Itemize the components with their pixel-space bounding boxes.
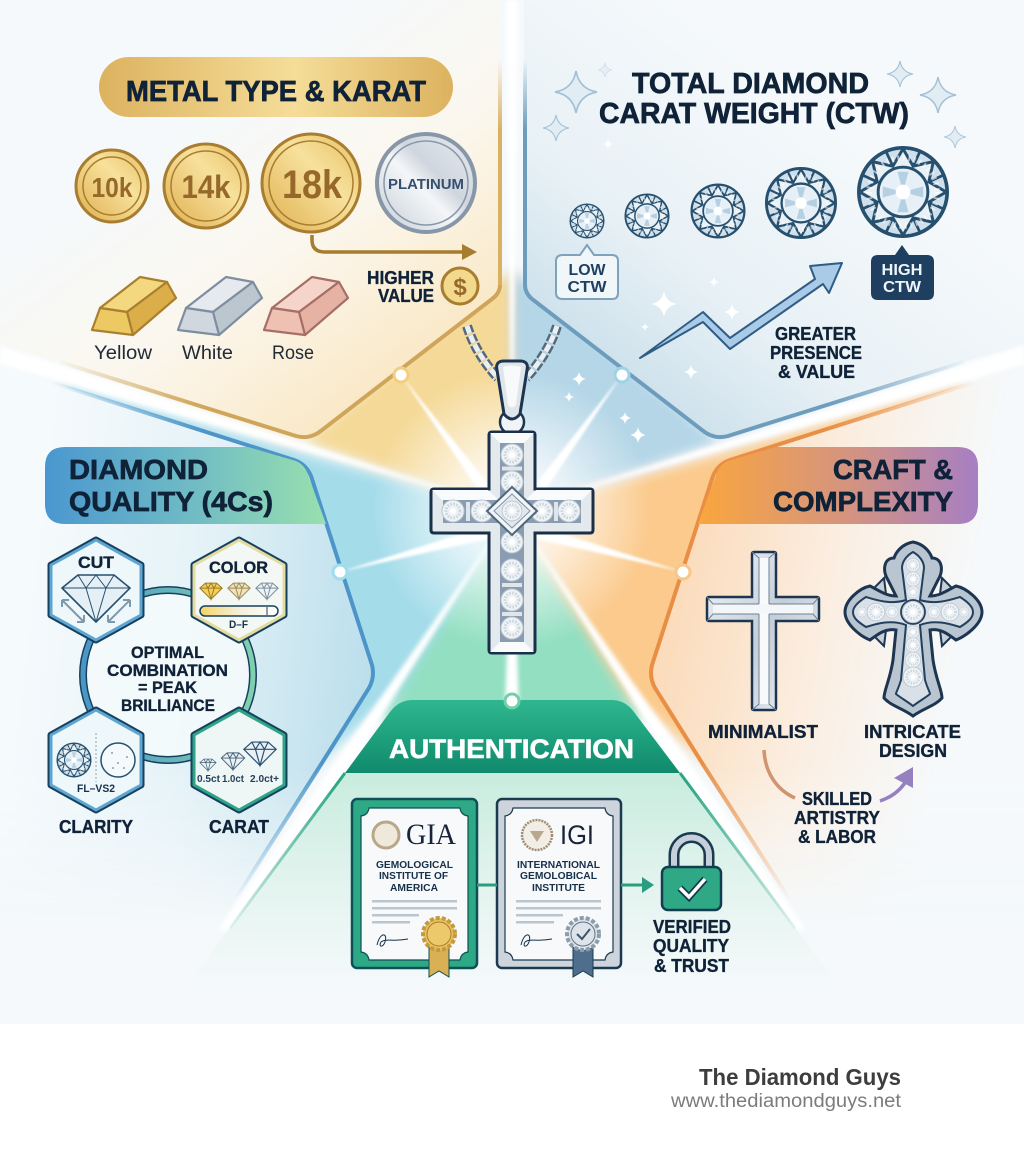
panel background (524, 0, 1024, 437)
heading band: COMPLEXITY (773, 486, 953, 517)
heading band (345, 700, 680, 773)
panel border (50, 382, 373, 900)
coin: 14k: 14k (182, 169, 231, 205)
icon: intricate cross (845, 542, 982, 716)
metal colour labels (94, 343, 314, 364)
heading band: CRAFT & (833, 454, 953, 485)
heading: TOTAL DIAMOND (632, 68, 869, 100)
hexagon: cut (51, 540, 141, 640)
hexagon: color: D–F (229, 619, 248, 631)
cross body (431, 432, 593, 653)
label: greater presence and value: & VALUE (778, 362, 855, 382)
certificate: IGI (497, 799, 621, 977)
coin: 10k: 10k (92, 172, 133, 203)
label: verified quality and trust: VERIFIED (653, 917, 731, 937)
jump ring (500, 410, 524, 434)
panel border (525, 60, 964, 437)
footer brand: www.thediamondguys.net (670, 1091, 902, 1112)
arrow: to verified lock (621, 877, 654, 893)
node markers (333, 368, 690, 708)
centre stone (487, 487, 537, 535)
heading band: AUTHENTICATION (389, 734, 634, 764)
metal colour labels: Rose (272, 343, 314, 364)
tag: high ctw (871, 245, 934, 300)
icon: dollar coin (442, 268, 478, 304)
central pendant illustration (431, 326, 593, 653)
hexagon: carat: 2.0ct+ (250, 774, 279, 785)
chain (467, 326, 557, 378)
footer brand: The Diamond Guys (699, 1064, 901, 1090)
label: intricate design: INTRICATE (864, 722, 961, 742)
icon: dollar coin: $ (453, 274, 467, 301)
label: intricate design (864, 722, 961, 761)
certificate: IGI: INTERNATIONAL (517, 859, 601, 871)
hexagon: carat (194, 710, 284, 810)
icon: padlock (662, 838, 721, 910)
hexagon: carat: 1.0ct (222, 774, 245, 785)
hexagon: carat: 0.5ct (197, 774, 221, 785)
metal bars between stones (466, 466, 558, 616)
arrow: skilled artistry to intricate (880, 767, 913, 801)
panel: total diamond carat weight (524, 0, 1024, 443)
heading band (698, 447, 978, 524)
panel: craft and complexity (649, 382, 984, 898)
central white glow (372, 370, 652, 650)
label: optimal combination (107, 643, 228, 715)
coin: platinum: PLATINUM (388, 176, 464, 193)
icon: white gold bar (178, 277, 262, 335)
white sparkles (564, 139, 740, 443)
label: higher value (367, 268, 434, 306)
metal colour labels: Yellow (94, 343, 152, 364)
icon: minimalist cross (707, 552, 819, 710)
label: higher value: HIGHER (367, 268, 434, 288)
label: higher value: VALUE (378, 286, 434, 306)
channel stones (442, 444, 580, 639)
coin: 18k (262, 134, 360, 232)
panel: metal type and karat (0, 0, 500, 437)
certificate: GIA (352, 799, 477, 977)
label: optimal combination: BRILLIANCE (121, 696, 215, 715)
coin: 10k (76, 150, 148, 222)
label: intricate design: DESIGN (879, 741, 947, 761)
panel: diamond quality 4Cs (45, 382, 375, 898)
label: skilled artistry and labor: & LABOR (798, 827, 876, 847)
hexagon: color: COLOR (209, 558, 268, 577)
heading pill (99, 57, 453, 117)
certificate: IGI: IGI (560, 820, 594, 850)
certificate: GIA: INSTITUTE OF (379, 870, 449, 882)
ring connecting the 4Cs (83, 590, 253, 760)
footer brand (670, 1064, 902, 1112)
coin: platinum (377, 134, 475, 232)
arrow: higher value (312, 235, 477, 260)
heading (599, 68, 909, 130)
hexagon: color (194, 540, 284, 640)
decorative sparkles (543, 61, 966, 148)
arrow: rising value (640, 263, 842, 358)
certificate: IGI: INSTITUTE (532, 882, 585, 894)
cross bevels (432, 433, 592, 652)
label: minimalist: MINIMALIST (708, 722, 818, 742)
icon: yellow gold bar (92, 277, 176, 335)
heading pill: METAL TYPE & KARAT (126, 76, 426, 108)
tag: low ctw: CTW (568, 279, 607, 296)
hexagon: clarity (51, 710, 141, 810)
label: clarity: CLARITY (59, 817, 133, 837)
tag: low ctw: LOW (568, 262, 606, 279)
stone channel (443, 443, 581, 642)
panel side lines (230, 773, 795, 928)
heading band (45, 447, 326, 524)
label: verified quality and trust: & TRUST (654, 956, 729, 976)
label: greater presence and value (770, 324, 862, 382)
label: optimal combination: = PEAK (138, 678, 198, 697)
panel: authentication (187, 700, 838, 985)
hexagon: cut: CUT (78, 553, 115, 572)
heading band: QUALITY (4Cs) (69, 486, 273, 517)
certificate: GIA: GIA (406, 818, 456, 851)
certificate: GIA: AMERICA (390, 882, 438, 894)
panel background (187, 773, 838, 985)
panel background (653, 386, 964, 876)
panel border (60, 60, 500, 437)
label: verified quality and trust (653, 917, 731, 976)
certificate: IGI: GEMOLOBICAL (520, 870, 598, 882)
coin: 14k (164, 144, 248, 228)
coin: 18k: 18k (282, 163, 343, 207)
hexagon: clarity: FL–VS2 (77, 783, 115, 795)
heading: CARAT WEIGHT (CTW) (599, 98, 909, 130)
label: skilled artistry and labor (794, 789, 880, 847)
label: optimal combination: COMBINATION (107, 661, 228, 680)
panel background (58, 386, 371, 888)
connector between certificates (477, 884, 497, 886)
glow sectors behind the panels (60, 270, 964, 770)
certificate: GIA: GEMOLOGICAL (376, 859, 454, 871)
label: carat: CARAT (209, 817, 269, 837)
diamond size progression (570, 148, 947, 238)
label: verified quality and trust: QUALITY (653, 936, 729, 956)
connector rays from nodes to centre (340, 375, 683, 572)
label: optimal combination: OPTIMAL (131, 643, 204, 662)
icon: rose gold bar (264, 277, 348, 335)
label: greater presence and value: PRESENCE (770, 343, 862, 363)
heading band: DIAMOND (69, 454, 208, 485)
footer band (0, 1024, 1024, 1154)
arrow: minimalist to skilled artistry (764, 750, 795, 798)
tag: high ctw: CTW (883, 279, 922, 296)
metal colour labels: White (182, 343, 233, 364)
bail (497, 361, 527, 419)
label: greater presence and value: GREATER (775, 324, 856, 344)
tag: high ctw: HIGH (882, 262, 922, 279)
label: skilled artistry and labor: SKILLED (802, 789, 872, 809)
label: skilled artistry and labor: ARTISTRY (794, 808, 880, 828)
panel border (651, 382, 976, 900)
tag: low ctw (556, 245, 618, 299)
panel background (0, 0, 500, 437)
